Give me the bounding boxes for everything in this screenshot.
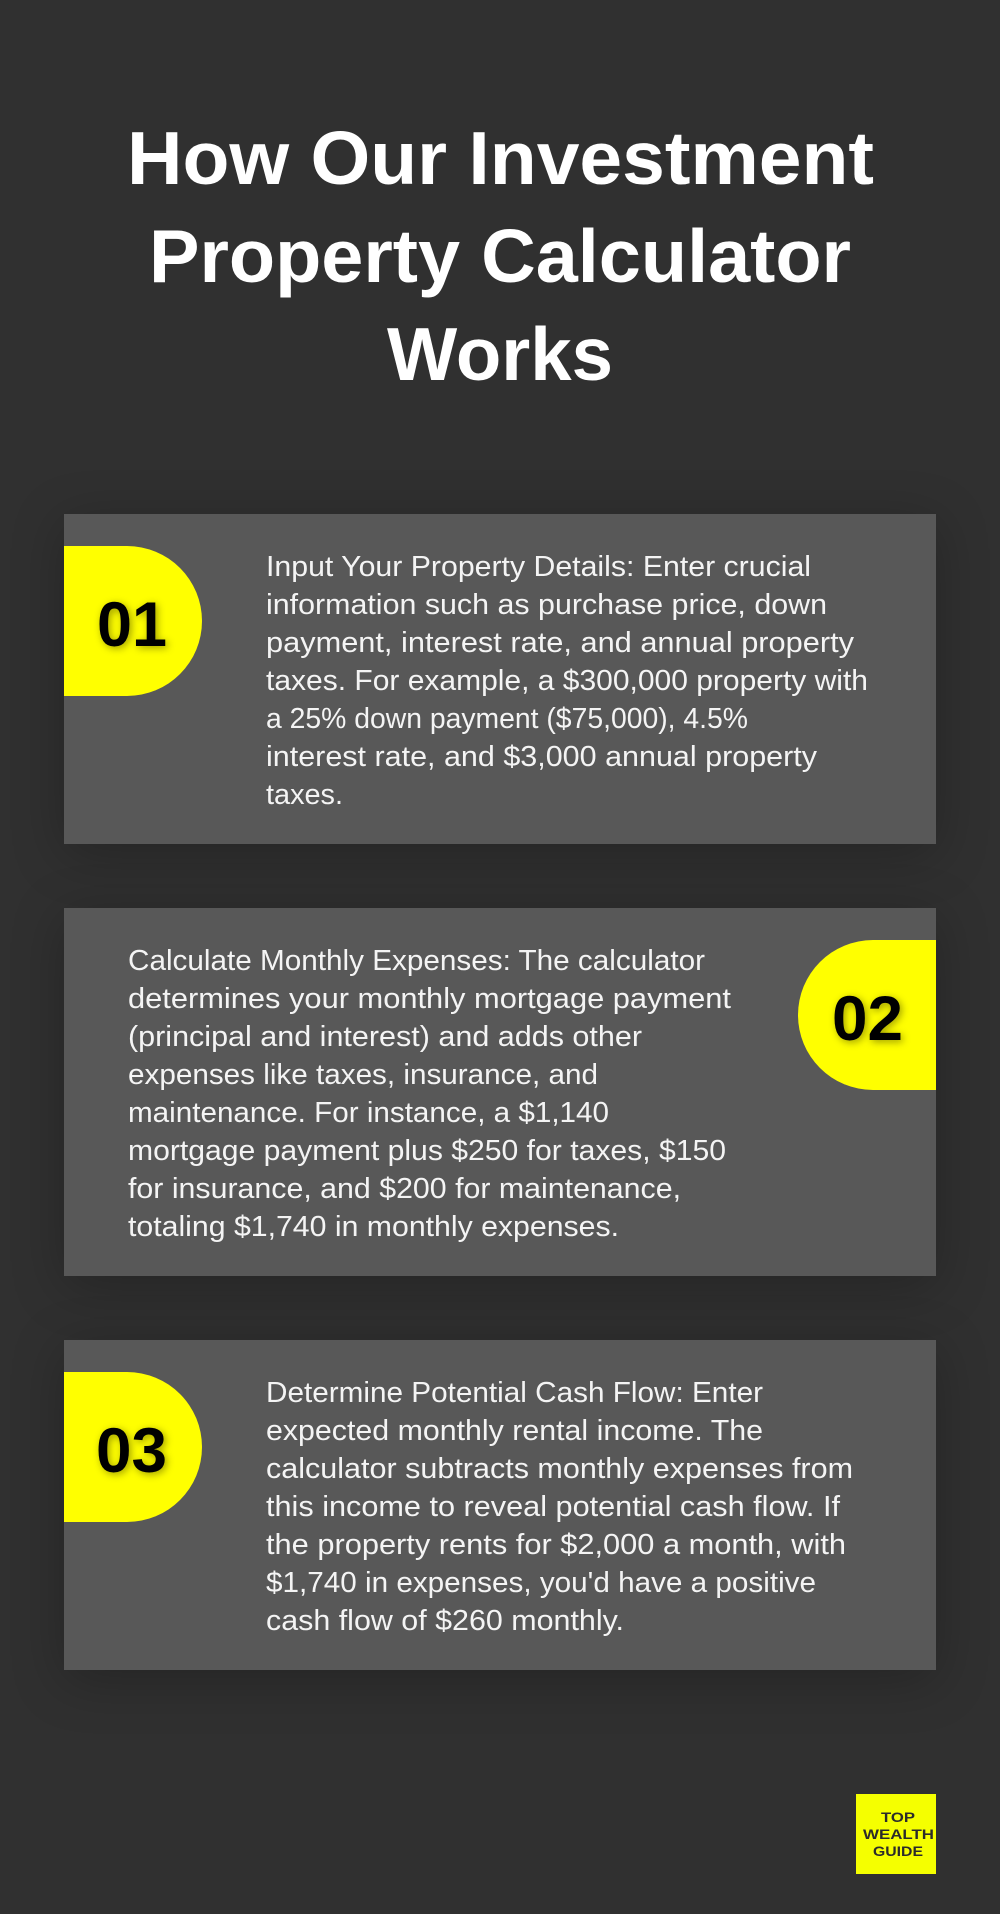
text block: step 02: mortgage payment plus $250 for taxes, $150: [128, 1135, 726, 1167]
text block: step 03: cash flow of $260 monthly.: [266, 1605, 624, 1637]
text block: step 03: Determine Potential Cash Flow: Enter: [266, 1377, 764, 1409]
panel: step 03: [64, 1340, 936, 1670]
badge: 02: 02: [832, 984, 903, 1054]
text block: step 01: a 25% down payment ($75,000), 4.5%: [266, 703, 748, 735]
text block: step 03: $1,740 in expenses, you'd have a positive: [266, 1567, 816, 1599]
text block: step 01: taxes. For example, a $300,000 property with: [266, 665, 868, 697]
text block: step 03: [266, 1377, 853, 1637]
text block: step 02: [128, 945, 731, 1243]
text block: step 02: expenses like taxes, insurance, and: [128, 1059, 598, 1091]
text block: step 03: calculator subtracts monthly expenses from: [266, 1453, 853, 1485]
text block: step 03: the property rents for $2,000 a month, with: [266, 1529, 846, 1561]
text block: step 02: Calculate Monthly Expenses: The calculator: [128, 945, 706, 977]
badge: 01: 01: [97, 590, 167, 660]
logo: Top Wealth Guide: TOP: [881, 1810, 915, 1825]
logo: Top Wealth Guide: GUIDE: [873, 1844, 923, 1859]
text block: step 02: determines your monthly mortgage payment: [128, 983, 731, 1015]
text block: step 01: [266, 551, 868, 811]
text block: step 01: Input Your Property Details: Enter crucial: [266, 551, 811, 583]
panel: step 01: [64, 514, 936, 844]
title: How Our Investment: [127, 116, 874, 200]
title: Property Calculator: [149, 214, 851, 298]
text block: step 01: interest rate, and $3,000 annual property: [266, 741, 818, 773]
title: Works: [387, 312, 613, 396]
text block: step 02: for insurance, and $200 for maintenance,: [128, 1173, 681, 1205]
text block: step 02: (principal and interest) and adds other: [128, 1021, 643, 1053]
text block: step 01: payment, interest rate, and annual property: [266, 627, 855, 659]
title: [127, 116, 874, 396]
text block: step 02: maintenance. For instance, a $1,140: [128, 1097, 609, 1129]
text block: step 02: totaling $1,740 in monthly expenses.: [128, 1211, 619, 1243]
text block: step 03: this income to reveal potential cash flow. If: [266, 1491, 840, 1523]
text block: step 01: taxes.: [266, 779, 343, 811]
badge: 01: [64, 546, 202, 696]
badge: 02: [798, 940, 936, 1090]
text block: step 03: expected monthly rental income. The: [266, 1415, 763, 1447]
logo: Top Wealth Guide: [856, 1794, 936, 1874]
logo: Top Wealth Guide: WEALTH: [863, 1827, 934, 1842]
badge: 03: 03: [96, 1416, 167, 1486]
text block: step 01: information such as purchase price, down: [266, 589, 827, 621]
panel: step 02: [64, 908, 936, 1276]
badge: 03: [64, 1372, 202, 1522]
